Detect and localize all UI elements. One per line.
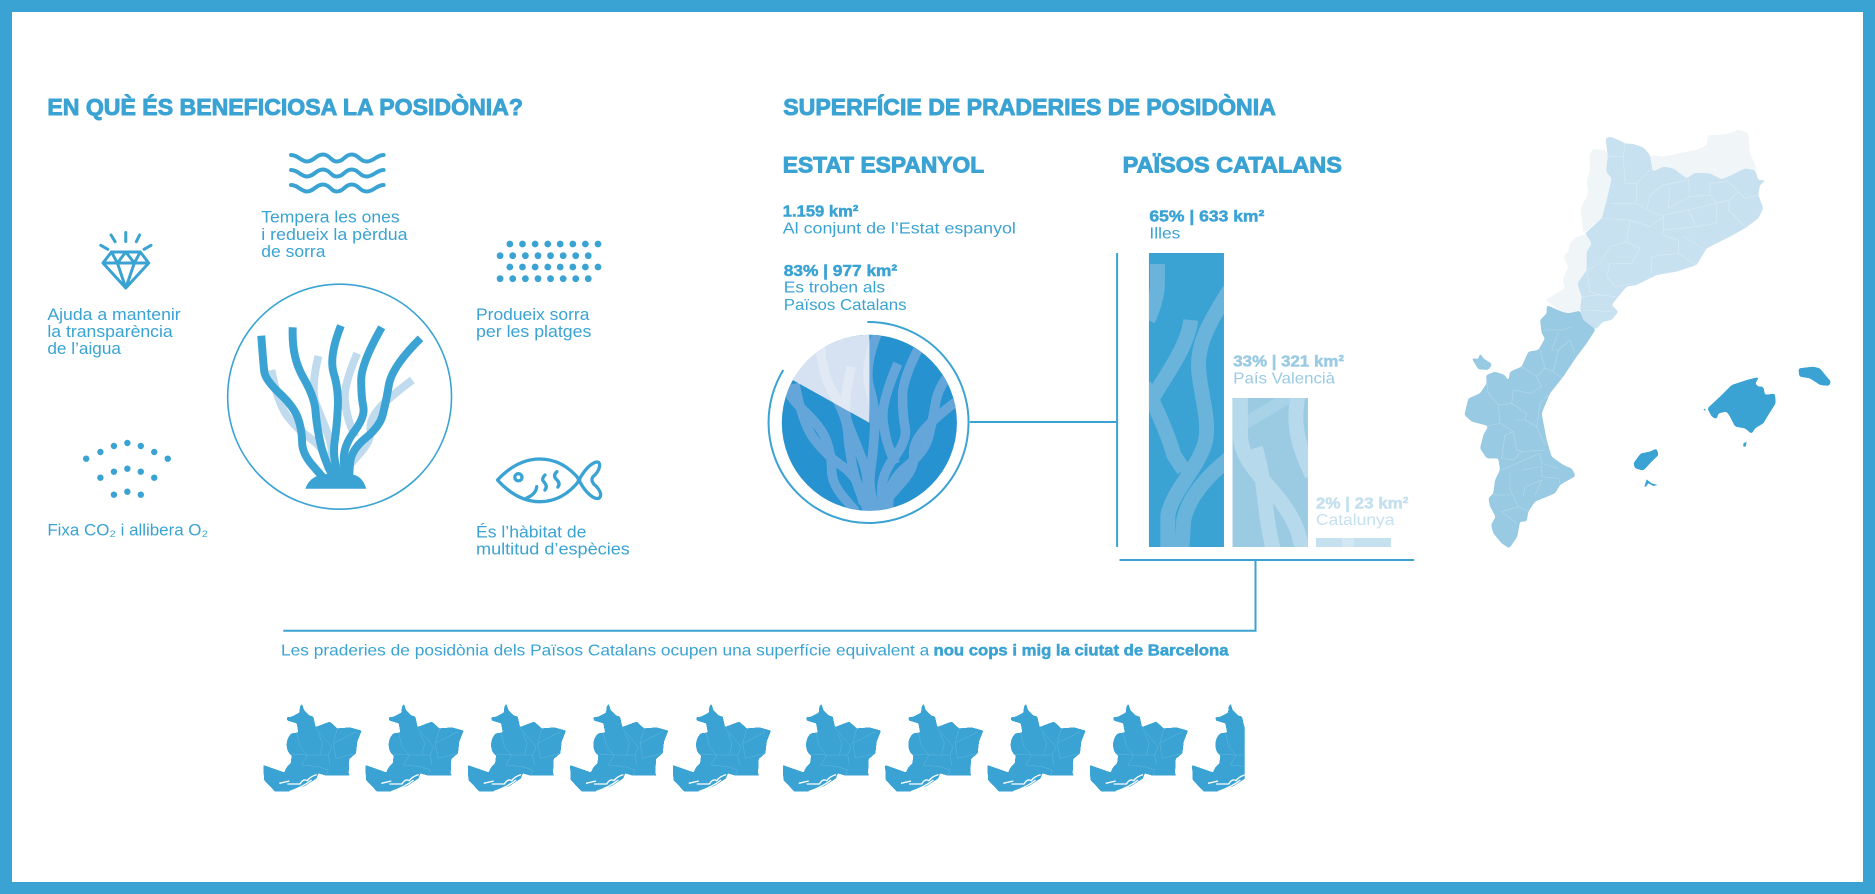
text: tempera les ones: i redueix la pèrdua <box>261 226 408 244</box>
baseline under bars <box>1119 559 1414 561</box>
map: Illes Balears <box>1633 367 1831 487</box>
label: País Valencià: 33% | 321 km² <box>1233 354 1344 371</box>
text: habitat: multitud d’espècies <box>476 540 630 558</box>
bar: País Valencià <box>1233 395 1312 550</box>
label: Catalunya <box>1316 495 1408 529</box>
label: Illes <box>1149 209 1264 242</box>
text: produeix sorra: Produeix sorra <box>476 306 590 324</box>
pie chart: 83 percent <box>769 322 974 523</box>
icon: CO2 dots <box>83 440 171 498</box>
stat: Spanish total: 1.159 km² <box>783 204 858 221</box>
text: fixa CO2: Fixa CO₂ i allibera O₂ <box>47 522 208 540</box>
text: transparencia: de l’aigua <box>47 340 122 358</box>
stat: share in Països Catalans: Països Catalans <box>784 297 907 314</box>
text: tempera les ones: Tempera les ones <box>261 209 400 227</box>
label: Catalunya: 2% | 23 km² <box>1316 495 1408 512</box>
icon: fish <box>498 459 601 502</box>
benefit: sand <box>476 241 601 341</box>
stat: share in Països Catalans <box>784 263 907 314</box>
stat: Spanish total: Al conjunt de l’Estat espanyol <box>783 220 1016 237</box>
benefit: habitat <box>476 459 630 558</box>
bar: Illes <box>1148 253 1224 547</box>
text: produeix sorra: per les platges <box>476 323 591 341</box>
connector: pie to bars <box>970 253 1117 547</box>
map: País Valencià <box>1464 305 1596 548</box>
panel: benefits of posidonia <box>47 94 630 558</box>
text: transparencia: Ajuda a mantenir <box>47 306 181 324</box>
icon: waves <box>291 154 384 192</box>
map of Països Catalans <box>1464 129 1831 548</box>
label: Catalunya: Catalunya <box>1316 512 1395 529</box>
text: transparencia <box>47 306 181 358</box>
text: habitat <box>476 523 630 558</box>
panel: meadow surface <box>769 94 1414 560</box>
label: País Valencià <box>1233 354 1344 387</box>
icon: sand dots <box>497 241 601 282</box>
comparison sentence: Les praderies de posidònia dels Països Catalans ocupen una superfície equivalent a <box>281 643 929 660</box>
Barcelona pictogram row <box>263 704 1290 792</box>
label: País Valencià: País Valencià <box>1233 370 1335 387</box>
map: surrounding lands <box>1545 129 1758 313</box>
text: tempera les ones: de sorra <box>261 243 326 261</box>
text: produeix sorra <box>476 306 591 341</box>
comparison sentence: nou cops i mig la ciutat de Barcelona <box>934 643 1229 660</box>
stat: share in Països Catalans: Es troben als <box>784 280 885 297</box>
connector: bars to Barcelona comparison <box>283 560 1256 631</box>
subheading: Estat espanyol: ESTAT ESPANYOL <box>783 153 984 178</box>
map: Catalunya <box>1577 137 1767 329</box>
comparison sentence <box>281 643 1229 660</box>
stat: Spanish total <box>783 204 1016 237</box>
benefit: transparency <box>47 232 181 358</box>
text: transparencia: la transparència <box>47 323 174 341</box>
text: tempera les ones <box>261 209 408 261</box>
icon: diamond <box>101 232 151 288</box>
bar: Catalunya <box>1316 538 1391 547</box>
heading: surface: SUPERFÍCIE DE PRADERIES DE POSIDÒNIA <box>783 94 1276 120</box>
label: Illes: Illes <box>1149 225 1180 242</box>
benefit: waves <box>261 154 408 261</box>
subheading: Països Catalans: PAÏSOS CATALANS <box>1123 153 1342 178</box>
heading: benefits: EN QUÈ ÉS BENEFICIOSA LA POSIDÒNIA? <box>47 94 523 120</box>
central posidonia illustration <box>228 284 452 509</box>
text: habitat: És l’hàbitat de <box>476 523 586 542</box>
label: Illes: 65% | 633 km² <box>1149 209 1264 226</box>
stat: share in Països Catalans: 83% | 977 km² <box>784 263 897 280</box>
benefit: CO2 <box>47 440 208 540</box>
